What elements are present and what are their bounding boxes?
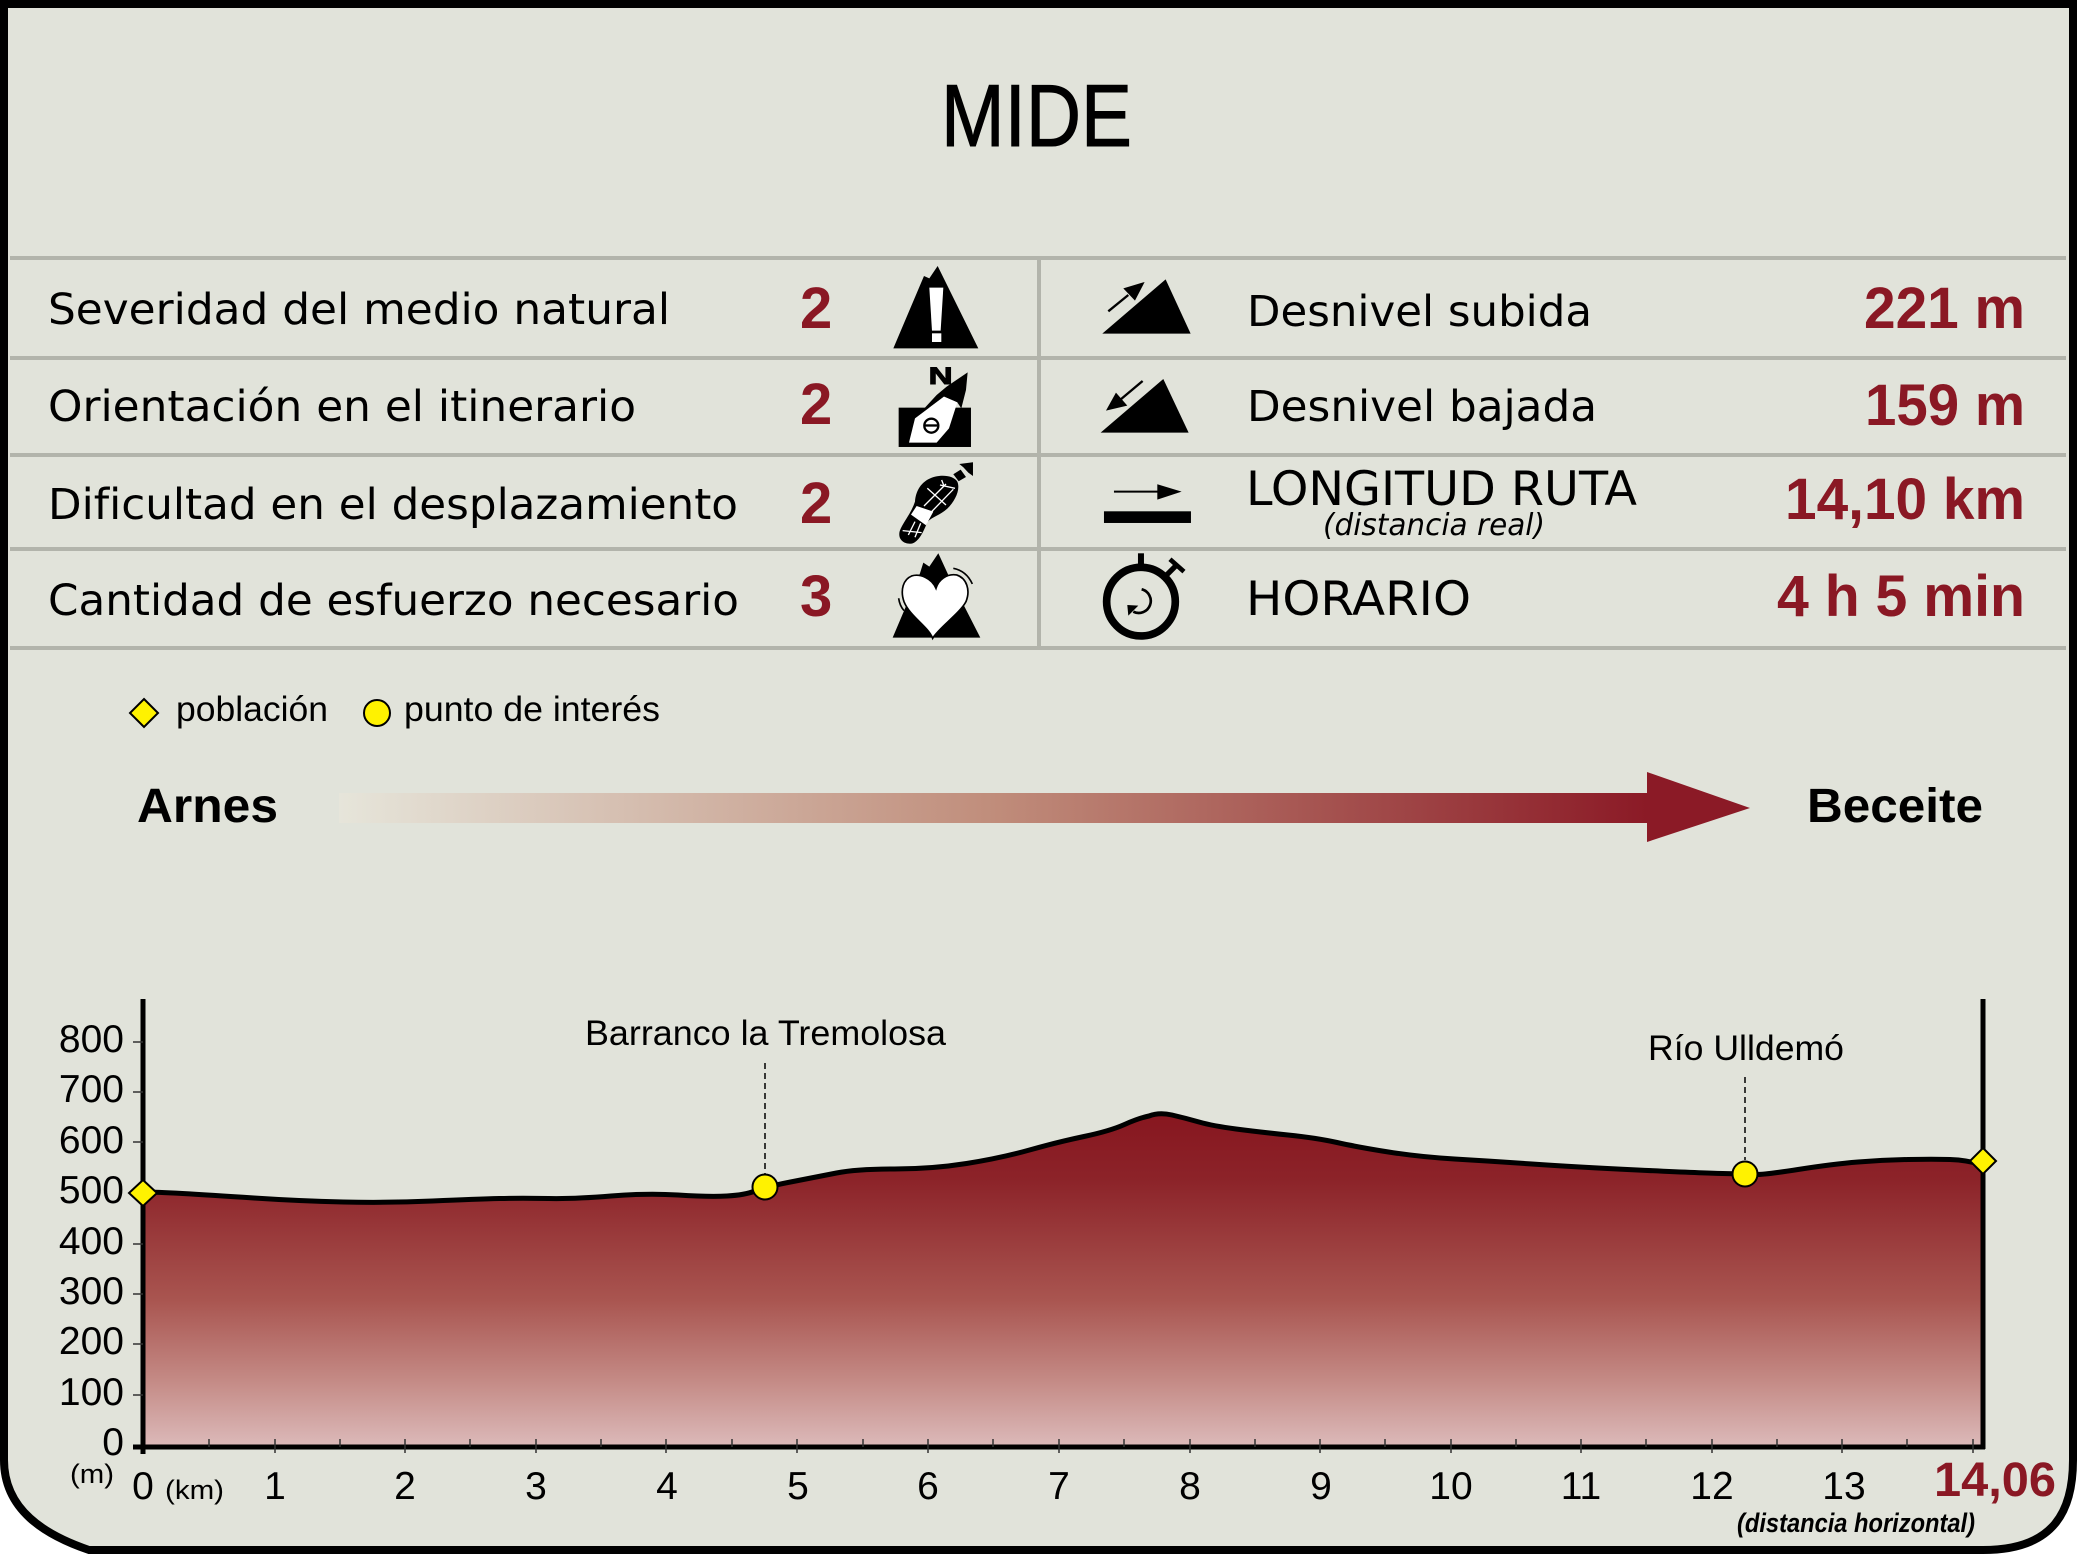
y axis labels: 400 — [59, 1220, 124, 1263]
icon: compass north — [899, 363, 971, 447]
x axis labels: 10 — [1429, 1465, 1473, 1508]
row label: desnivel subida: Desnivel subida — [1247, 287, 1592, 337]
y axis labels: 800 — [59, 1018, 124, 1061]
route origin: Arnes: Arnes — [137, 780, 278, 833]
y axis unit: (m) — [70, 1459, 114, 1489]
value: horario: 4 h 5 min — [1777, 564, 2025, 629]
x axis unit: (km) — [165, 1475, 224, 1505]
value: desnivel bajada: 159 m — [1865, 373, 2025, 438]
y axis labels: 500 — [59, 1169, 124, 1212]
value: esfuerzo: 3 — [800, 564, 832, 629]
icon: length arrow — [1104, 484, 1191, 523]
row label: severidad: Severidad del medio natural — [48, 285, 670, 335]
row label: orientacion: Orientación en el itinerario — [48, 382, 636, 432]
x axis labels: 12 — [1690, 1465, 1734, 1508]
note: distancia real: (distancia real) — [1323, 508, 1545, 543]
row label: longitud ruta: LONGITUD RUTA — [1246, 462, 1637, 517]
x axis labels: 4 — [656, 1465, 678, 1508]
icon: heart mountain — [893, 553, 980, 638]
x axis labels: 9 — [1310, 1465, 1332, 1508]
x axis labels: 6 — [917, 1465, 939, 1508]
axes — [133, 999, 1985, 1454]
callout: Rio Ulldemo: Río Ulldemó — [1648, 1029, 1844, 1068]
note: distancia horizontal: (distancia horizontal) — [1737, 1508, 1975, 1538]
callout: Barranco la Tremolosa: Barranco la Tremolosa — [585, 1014, 947, 1053]
marker: end town — [1970, 1148, 1996, 1174]
value: dificultad: 2 — [800, 471, 832, 536]
value: orientacion: 2 — [800, 372, 832, 437]
marker: start town — [129, 1180, 157, 1206]
legend text: punto de interes: punto de interés — [404, 690, 660, 729]
legend — [130, 690, 660, 729]
y axis labels: 600 — [59, 1119, 124, 1162]
x axis labels: 7 — [1048, 1465, 1070, 1508]
x axis labels — [132, 1465, 1866, 1508]
value: severidad: 2 — [800, 276, 832, 341]
x axis labels: 1 — [264, 1465, 286, 1508]
row label: esfuerzo: Cantidad de esfuerzo necesario — [48, 576, 739, 626]
y axis labels: 700 — [59, 1068, 124, 1111]
x axis labels: 2 — [394, 1465, 416, 1508]
y axis labels: 0 — [102, 1421, 124, 1464]
panel: MIDE table — [10, 256, 2066, 650]
title: MIDE — [941, 66, 1132, 165]
y axis labels: 200 — [59, 1320, 124, 1363]
x axis labels: 8 — [1179, 1465, 1201, 1508]
chart: elevation profile — [59, 999, 2056, 1538]
icon: stopwatch — [1107, 553, 1184, 636]
icon: warning mountain — [893, 266, 978, 348]
value: longitud ruta: 14,10 km — [1785, 467, 2025, 532]
total distance: 14,06 — [1934, 1454, 2056, 1507]
icon: slope down — [1101, 379, 1189, 433]
icon: slope up — [1102, 279, 1191, 334]
row label: desnivel bajada: Desnivel bajada — [1247, 382, 1597, 432]
x axis labels: 0 — [132, 1465, 154, 1508]
profile line — [143, 1114, 1983, 1202]
icon: compass north: N — [929, 363, 953, 390]
route destination: Beceite: Beceite — [1807, 780, 1983, 833]
x axis labels: 11 — [1561, 1465, 1601, 1508]
x axis labels: 3 — [525, 1465, 547, 1508]
icon: punto de interes circle — [364, 700, 390, 726]
x axis labels: 13 — [1822, 1465, 1866, 1508]
y axis labels: 100 — [59, 1371, 124, 1414]
callout: Barranco la Tremolosa — [585, 1014, 947, 1200]
legend text: poblacion: población — [176, 690, 328, 729]
axis ticks — [133, 1042, 1973, 1453]
value: desnivel subida: 221 m — [1864, 276, 2025, 341]
y axis labels: 300 — [59, 1270, 124, 1313]
row label: dificultad: Dificultad en el desplazamiento — [48, 480, 738, 530]
y axis labels — [59, 1018, 124, 1464]
profile area — [143, 1114, 1983, 1447]
callout: Rio Ulldemo — [1648, 1029, 1844, 1186]
row label: horario: HORARIO — [1246, 572, 1471, 627]
icon: poblacion diamond — [130, 699, 158, 727]
icon: boot sole — [899, 462, 973, 544]
x axis labels: 5 — [787, 1465, 809, 1508]
arrow: route direction — [339, 772, 1750, 842]
